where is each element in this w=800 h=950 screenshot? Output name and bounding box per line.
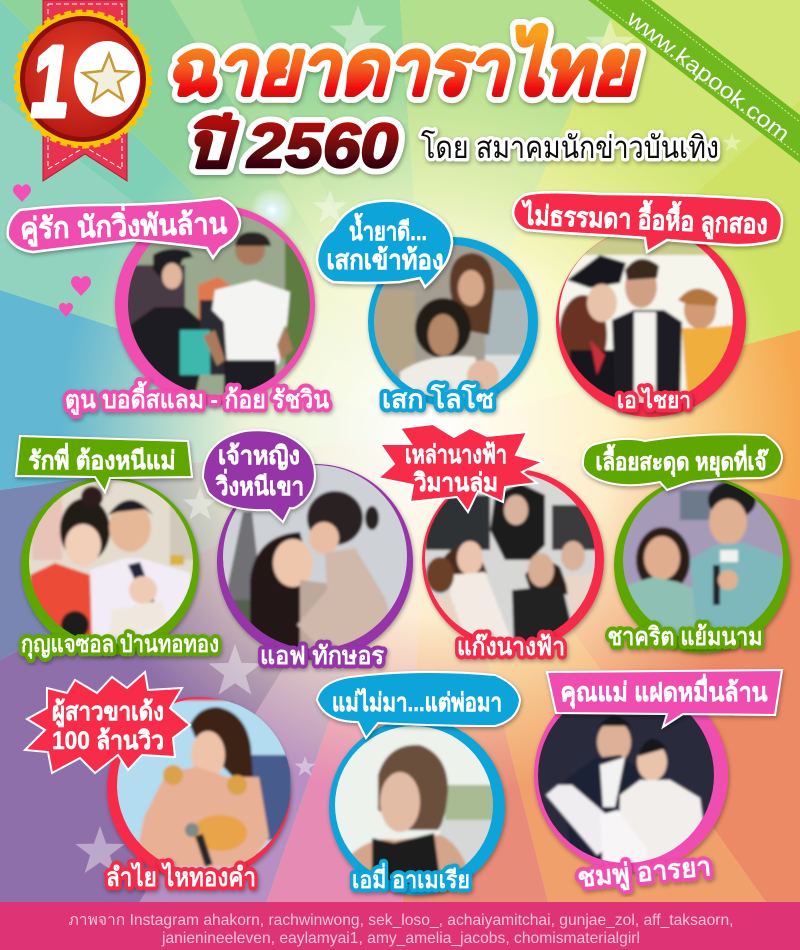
- green corner ribbon: kapook: [588, 0, 800, 163]
- decorative stars: [75, 5, 742, 873]
- panel: lamyai: [25, 672, 295, 892]
- photo: [220, 462, 410, 655]
- panel: chompoo: [530, 670, 782, 895]
- panel: amy: [317, 672, 520, 895]
- panel: a chaiya: [513, 192, 782, 417]
- callout text: 100 ล้านวิว: [52, 727, 164, 755]
- photo: [374, 245, 528, 398]
- panel: amy: แม่ไม่มา...แต่พ่อมา: [332, 687, 502, 717]
- ribbon: [43, 0, 127, 181]
- callout text: [52, 698, 164, 755]
- name: เสก โลโซ: [382, 383, 494, 414]
- panel: aff: เจ้าหญิง: [218, 442, 300, 470]
- panel: gunjae: [16, 436, 219, 660]
- photo: [128, 216, 310, 395]
- name: แก๊งนางฟ้า: [457, 633, 565, 661]
- bubble: [513, 192, 782, 252]
- name: เอ ไชยา: [617, 386, 691, 413]
- bubble: [583, 434, 782, 490]
- panel: chakrit: [583, 434, 790, 653]
- name: ตูน บอดี้สแลม - ก้อย รัชวิน: [65, 380, 329, 416]
- footer credits: ภาพจาก Instagram ahakorn, rachwinwong, sek_loso_, achaiyamitchai, gunjae_zol, aff_taksaorn,: [68, 912, 734, 929]
- footer credits: [0, 902, 800, 950]
- callout text: เหล่านางฟ้า: [405, 441, 507, 469]
- name: แอฟ ทักษอร: [260, 642, 385, 670]
- panel: sek loso: [317, 201, 538, 414]
- panel: sek loso: น้ำยาดี...: [349, 212, 427, 246]
- photo: [623, 480, 783, 636]
- callout text: [405, 441, 507, 497]
- bubble: [317, 201, 452, 287]
- subtitle year: ปี 2560: [186, 112, 398, 181]
- panel: couple runners: [8, 198, 329, 416]
- starburst callout: [25, 672, 190, 773]
- name: ชมพู่ อารยา: [576, 851, 712, 895]
- number 10: [31, 26, 140, 138]
- photo: [538, 714, 714, 863]
- bubble: [203, 430, 315, 522]
- bubble: [8, 198, 240, 258]
- hearts: [13, 184, 91, 317]
- photo: [425, 474, 595, 642]
- panel: aff: [203, 430, 413, 670]
- name: กุญแจซอล ป่านทอทอง: [21, 631, 219, 660]
- medal badge: top 10: [16, 0, 150, 181]
- photo: [559, 236, 733, 403]
- name: ลำไย ไหทองคำ: [106, 861, 256, 892]
- footer credits: janienineeleven, eaylamyai1, amy_amelia_jacobs, chomismaterialgirl: [161, 930, 640, 947]
- name: ชาคริต แย้มนาม: [608, 623, 762, 651]
- bubble: [317, 672, 520, 738]
- subtitle year: ปี 2560: [186, 112, 398, 181]
- bubble: [16, 436, 192, 492]
- title: ฉายาดาราไทย: [166, 24, 640, 111]
- photo: [115, 700, 295, 870]
- subtitle organiser: โดย สมาคมนักข่าวบันเทิง: [421, 130, 719, 165]
- photo: [335, 726, 493, 884]
- green corner ribbon: kapook: www.kapook.com: [622, 5, 795, 146]
- panel: aff: วิ่งหนีเขา: [215, 469, 304, 501]
- starburst callout: [378, 424, 543, 512]
- panel: chompoo: คุณแม่ แฝดหมื่นล้าน: [560, 673, 768, 709]
- number 10: 1: [31, 26, 69, 138]
- name: เอมี่ อาเมเรีย: [352, 862, 470, 894]
- panel: gunjae: รักพี่ ต้องหนีแม่: [28, 443, 176, 475]
- callout text: ผู้สาวขาเด้ง: [52, 698, 164, 728]
- panel: sek loso: เสกเข้าท้อง: [326, 245, 444, 275]
- bubble: [547, 670, 782, 727]
- panel: chakrit: เลื้อยสะดุด หยุดที่เจ๊: [596, 443, 769, 478]
- title: ฉายาดาราไทย: [166, 24, 640, 111]
- callout text: วิมานล่ม: [413, 469, 498, 497]
- panel: gang nang fah: [378, 424, 604, 661]
- panel: couple runners: คู่รัก นักวิ่งพันล้าน: [20, 202, 228, 247]
- photo: [25, 478, 198, 648]
